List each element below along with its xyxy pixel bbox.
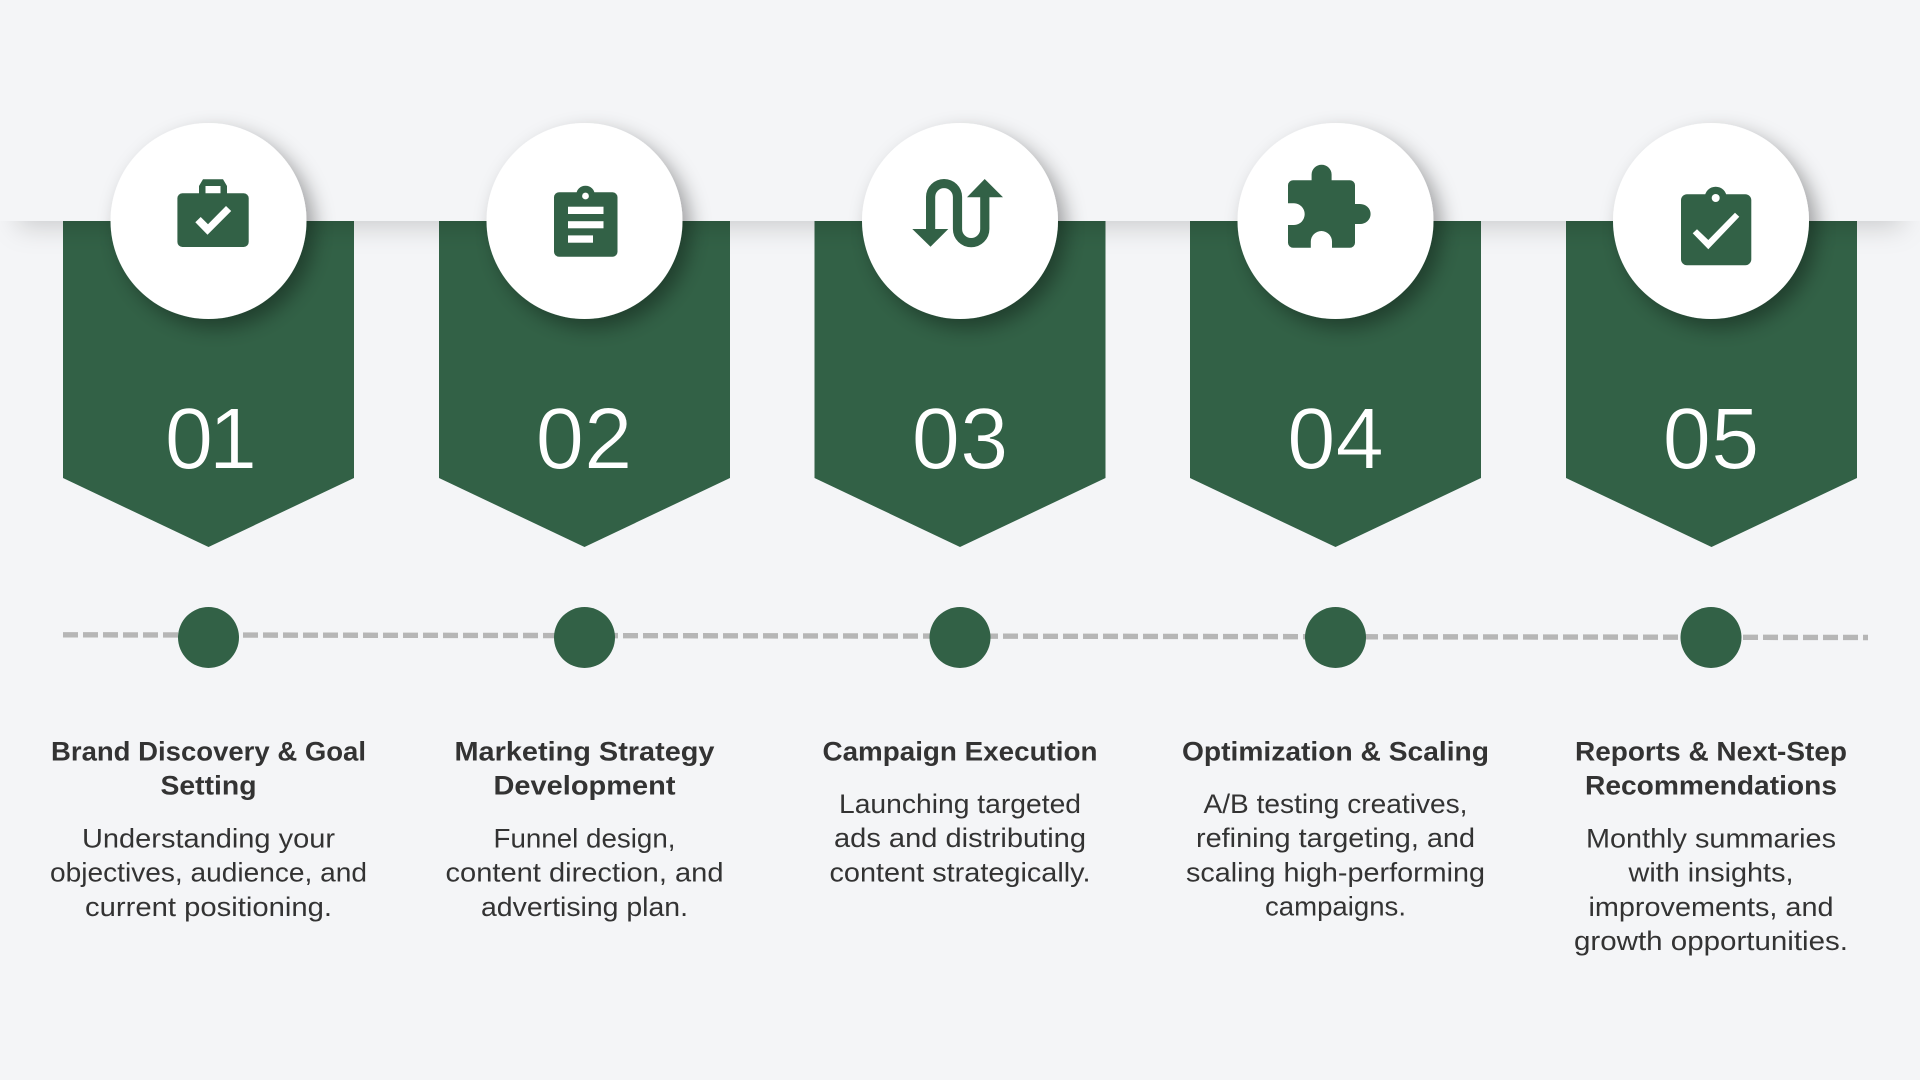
- heading: step 1: [51, 737, 366, 801]
- banner 1: [63, 221, 354, 547]
- description: step 4: campaigns.: [1265, 892, 1406, 922]
- text block: step 2: [446, 737, 724, 922]
- icon: up and down flow arrows: [912, 179, 1003, 247]
- description: step 1: current positioning.: [85, 892, 332, 922]
- text block: step 5: [1574, 737, 1848, 956]
- timeline dot 5: [1680, 607, 1742, 668]
- step number 01: 01: [165, 390, 257, 488]
- description: step 4: [1186, 789, 1485, 922]
- heading: step 1: Brand Discovery & Goal: [51, 737, 366, 767]
- heading: step 1: Setting: [160, 771, 256, 801]
- heading: step 5: Reports & Next-Step: [1575, 737, 1847, 767]
- description: step 5: with insights,: [1627, 858, 1794, 888]
- step number 05: 05: [1663, 390, 1759, 488]
- icon circle 2: [486, 123, 682, 319]
- text block: step 3: [822, 737, 1098, 887]
- banner 5: [1566, 221, 1857, 547]
- description: step 5: growth opportunities.: [1574, 926, 1848, 956]
- icon: briefcase with check: [177, 179, 249, 247]
- timeline dot 4: [1305, 607, 1366, 668]
- banner 3: [814, 221, 1106, 547]
- description: step 2: content direction, and: [446, 858, 724, 888]
- dashed timeline: [63, 635, 1868, 638]
- timeline dot 3: [930, 607, 990, 668]
- timeline dot 2: [554, 607, 615, 668]
- description: step 1: objectives, audience, and: [50, 858, 367, 888]
- heading: step 2: Development: [494, 771, 676, 801]
- description: step 4: refining targeting, and: [1196, 823, 1475, 853]
- icon circle 4: [1238, 123, 1434, 319]
- text block: step 4: [1182, 737, 1489, 922]
- description: step 3: Launching targeted: [839, 789, 1081, 819]
- icon: puzzle piece: [1288, 165, 1371, 248]
- description: step 3: content strategically.: [830, 857, 1090, 887]
- heading: step 2: [454, 737, 714, 801]
- timeline dot 1: [178, 607, 239, 668]
- icon: clipboard with check: [1681, 187, 1751, 265]
- icon circle 3: [862, 123, 1058, 319]
- description: step 4: scaling high-performing: [1186, 857, 1485, 887]
- description: step 2: [446, 824, 724, 922]
- description: step 2: advertising plan.: [481, 892, 688, 922]
- description: step 4: A/B testing creatives,: [1204, 789, 1468, 819]
- description: step 3: [830, 789, 1090, 887]
- top band shadow: [18, 0, 1902, 221]
- step number 02: 02: [536, 390, 632, 488]
- heading: step 5: Recommendations: [1585, 771, 1837, 801]
- text block: step 1: [50, 737, 367, 922]
- heading: step 4: Optimization & Scaling: [1182, 737, 1489, 767]
- banner 4: [1190, 221, 1481, 547]
- description: step 2: Funnel design,: [494, 824, 676, 854]
- description: step 5: [1574, 824, 1848, 956]
- heading: step 2: Marketing Strategy: [454, 737, 714, 767]
- icon: clipboard with lines: [554, 186, 618, 257]
- icon circle 1: [110, 123, 306, 319]
- icon circle 5: [1613, 123, 1809, 319]
- description: step 5: improvements, and: [1588, 892, 1834, 922]
- step number 04: 04: [1287, 390, 1384, 488]
- description: step 3: ads and distributing: [834, 823, 1086, 853]
- description: step 5: Monthly summaries: [1586, 824, 1836, 854]
- heading: step 3: Campaign Execution: [822, 737, 1098, 767]
- heading: step 5: [1575, 737, 1847, 801]
- description: step 1: Understanding your: [82, 824, 335, 854]
- banner 2: [439, 221, 730, 547]
- description: step 1: [50, 824, 367, 922]
- step number 03: 03: [912, 390, 1008, 488]
